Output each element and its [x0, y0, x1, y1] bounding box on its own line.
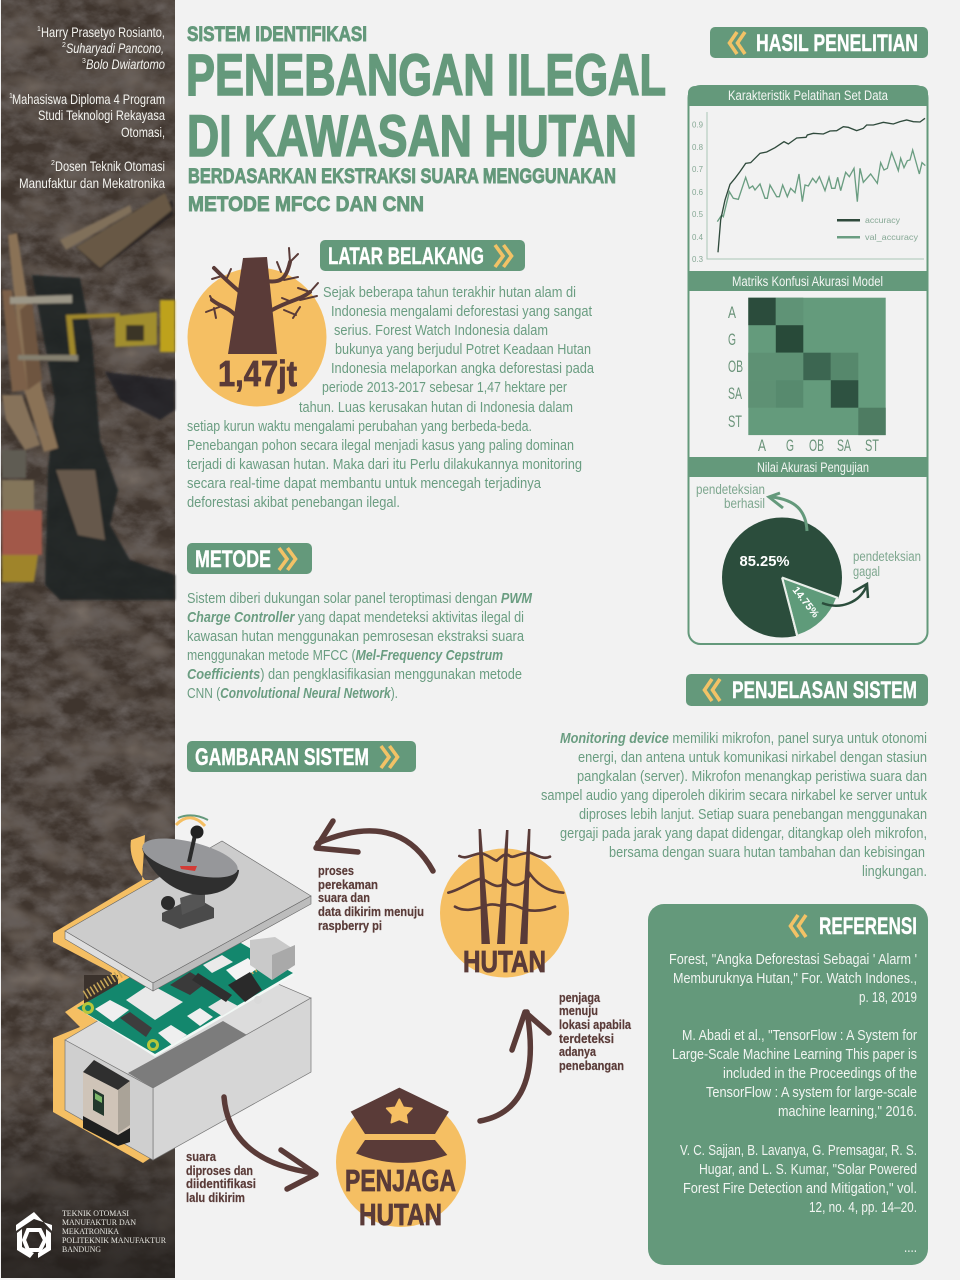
- text block: metode: Coefficients) dan pengklasifikasian menggunakan metode: [187, 666, 522, 683]
- text block: latar belakang: bukunya yang berjudul Potret Keadaan Hutan: [335, 341, 591, 358]
- line chart: accuracy and val_accuracy: val_accuracy: [865, 232, 919, 242]
- confusion matrix: [728, 298, 886, 455]
- reference list: machine learning," 2016.: [778, 1103, 917, 1120]
- chart header: matriks: Matriks Konfusi Akurasi Model: [732, 274, 883, 289]
- authors and affiliations: Suharyadi Pancono,: [66, 40, 164, 56]
- text block: latar belakang: deforestasi akibat penebangan ilegal.: [187, 494, 400, 511]
- reference list: ....: [904, 1239, 917, 1256]
- heading: penjelasan sistem: [686, 674, 928, 706]
- text block: latar belakang: periode 2013-2017 sebesar 1,47 hektare per: [322, 379, 567, 396]
- arrow: penjaga hutan to hutan: [480, 1012, 549, 1121]
- arrow: device to penjaga hutan: [224, 1097, 316, 1189]
- logo: politeknik manufaktur bandung: MEKATRONIKA: [62, 1227, 119, 1236]
- photo strip: logging site aerial: [1, 0, 175, 1278]
- reference list: Memburuknya Hutan," For. Watch Indones.,: [673, 970, 917, 987]
- authors and affiliations: 2: [62, 42, 66, 49]
- reference list: included in the Proceedings of the: [723, 1065, 917, 1082]
- line chart: accuracy and val_accuracy: accuracy: [865, 215, 901, 225]
- chart header: karakteristik: Karakteristik Pelatihan Set Data: [728, 88, 888, 103]
- heading: hasil penelitian: [710, 27, 928, 58]
- label: suara diproses: diidentifikasi: [186, 1176, 256, 1191]
- text block: latar belakang: setiap kurun waktu mengalami perubahan yang berbeda-beda.: [187, 418, 532, 435]
- icon: penjaga hutan: [336, 1088, 466, 1232]
- text block: metode: Charge Controller yang dapat mendeteksi aktivitas ilegal di: [187, 609, 524, 626]
- label: pendeteksian gagal: [822, 549, 921, 606]
- reference list: 12, no. 4, pp. 14–20.: [809, 1199, 917, 1216]
- illustration: monitoring device exploded view: [53, 815, 311, 1163]
- line chart: accuracy and val_accuracy: 0.8: [692, 142, 703, 152]
- authors and affiliations: Bolo Dwiartomo: [86, 56, 165, 72]
- logo: politeknik manufaktur bandung: MANUFAKTUR DAN: [62, 1218, 136, 1227]
- confusion matrix: OB: [728, 357, 743, 376]
- label: suara diproses: diproses dan: [186, 1163, 253, 1178]
- confusion matrix: ST: [728, 412, 742, 431]
- confusion matrix: G: [728, 330, 736, 349]
- chart header: nilai akurasi: Nilai Akurasi Pengujian: [757, 460, 869, 475]
- title: SISTEM IDENTIFIKASI: [187, 23, 367, 46]
- confusion matrix: OB: [809, 436, 824, 455]
- logo: politeknik manufaktur bandung: [16, 1209, 167, 1258]
- confusion matrix: A: [758, 436, 766, 455]
- text block: metode: kawasan hutan menggunakan pemrosesan ekstraksi suara: [187, 628, 525, 645]
- label: proses perekaman: perekaman: [318, 877, 378, 892]
- label: penjaga menuju lokasi: adanya: [559, 1044, 597, 1059]
- heading: referensi: REFERENSI: [819, 913, 917, 940]
- enclosure box: [65, 955, 311, 1160]
- label: penjaga menuju lokasi: penebangan: [559, 1058, 624, 1073]
- raspberry pi board: [77, 928, 295, 1057]
- reference list: [669, 951, 917, 1256]
- label: penjaga menuju lokasi: lokasi apabila: [559, 1017, 632, 1032]
- icon: tree stump with 1,47jt: [188, 248, 326, 406]
- label: pendeteksian berhasil: berhasil: [724, 496, 765, 511]
- authors and affiliations: Mahasiswa Diploma 4 Program: [12, 91, 165, 107]
- title: METODE MFCC DAN CNN: [188, 192, 424, 216]
- text block: latar belakang: [187, 284, 595, 511]
- authors and affiliations: Dosen Teknik Otomasi: [55, 158, 165, 174]
- text block: penjelasan sistem: [541, 730, 927, 880]
- confusion matrix: ST: [865, 436, 879, 455]
- authors and affiliations: 3: [82, 58, 86, 65]
- line chart: accuracy and val_accuracy: 0.5: [692, 209, 703, 219]
- label: penjaga menuju lokasi: penjaga: [559, 990, 601, 1005]
- authors and affiliations: 2: [51, 160, 55, 167]
- panel: referensi: [648, 904, 928, 1265]
- confusion matrix: G: [786, 436, 794, 455]
- reference list: TensorFlow : A system for large-scale: [706, 1084, 917, 1101]
- panel: hasil penelitian charts: [688, 86, 928, 644]
- solar charge controller: [83, 1060, 130, 1146]
- text block: latar belakang: Indonesia melaporkan angka deforestasi pada: [331, 360, 595, 377]
- chart header: nilai akurasi: [688, 457, 928, 477]
- heading: metode: METODE: [195, 546, 271, 573]
- authors and affiliations: 1: [37, 26, 41, 33]
- authors and affiliations: Otomasi,: [121, 124, 165, 140]
- label: proses perekaman: suara dan: [318, 890, 370, 905]
- authors and affiliations: Manufaktur dan Mekatronika: [19, 175, 165, 191]
- icon: tree stump with 1,47jt: 1,47jt: [218, 353, 297, 394]
- heading: latar belakang: LATAR BELAKANG: [328, 243, 484, 270]
- icon: penjaga hutan: PENJAGA: [345, 1163, 456, 1198]
- label: proses perekaman: proses: [318, 863, 354, 878]
- confusion matrix: A: [728, 303, 736, 322]
- label: pendeteksian gagal: pendeteksian: [853, 549, 921, 564]
- label: suara diproses: lalu dikirim: [186, 1190, 245, 1205]
- authors and affiliations: 1: [9, 93, 13, 100]
- text block: latar belakang: terjadi di kawasan hutan. Maka dari itu Perlu dilakukannya monitoring: [187, 456, 582, 473]
- title: DI KAWASAN HUTAN: [187, 104, 637, 169]
- reference list: M. Abadi et al., "TensorFlow : A System for: [682, 1027, 917, 1044]
- icon: penjaga hutan: HUTAN: [359, 1197, 442, 1232]
- label: penjaga menuju lokasi: terdeteksi: [559, 1031, 614, 1046]
- label: proses perekaman: raspberry pi: [318, 918, 382, 933]
- text block: metode: [187, 590, 532, 702]
- arrow: hutan to device: [316, 821, 433, 871]
- authors and affiliations: Studi Teknologi Rekayasa: [38, 107, 165, 123]
- text block: penjelasan sistem: lingkungan.: [862, 863, 927, 880]
- reference list: Forest Fire Detection and Mitigation," vol.: [683, 1180, 917, 1197]
- label: suara diproses: suara: [186, 1149, 217, 1164]
- line chart: accuracy and val_accuracy: [692, 112, 925, 264]
- chart header: matriks: [688, 271, 928, 291]
- heading: gambaran sistem: GAMBARAN SISTEM: [195, 744, 369, 771]
- title: BERDASARKAN EKSTRAKSI SUARA MENGGUNAKAN: [188, 164, 616, 188]
- label: pendeteksian berhasil: pendeteksian: [696, 482, 765, 497]
- text block: latar belakang: Penebangan pohon secara ilegal menjadi kasus yang paling dominan: [187, 437, 574, 454]
- text block: metode: Sistem diberi dukungan solar panel teroptimasi dengan PWM: [187, 590, 532, 607]
- reference list: Large-Scale Machine Learning This paper is: [672, 1046, 917, 1063]
- text block: latar belakang: secara real-time dapat membantu untuk mencegah terjadinya: [187, 475, 542, 492]
- pie chart: akurasi pengujian: 85.25%: [740, 553, 790, 570]
- label: suara diproses: [186, 1149, 256, 1205]
- device shadow outline: [53, 815, 208, 1163]
- top plate: [65, 841, 311, 991]
- label: proses perekaman: data dikirim menuju: [318, 904, 424, 919]
- text block: metode: CNN (Convolutional Neural Network).: [187, 685, 398, 702]
- reference list: p. 18, 2019: [859, 989, 917, 1006]
- pie chart: akurasi pengujian: [722, 518, 842, 640]
- label: penjaga menuju lokasi: menuju: [559, 1003, 598, 1018]
- line chart: accuracy and val_accuracy: 0.4: [692, 232, 703, 242]
- text block: latar belakang: serius. Forest Watch Indonesia dalam: [334, 322, 548, 339]
- icon: hutan: [440, 829, 569, 979]
- reference list: Hugar, and L. S. Kumar, "Solar Powered: [699, 1161, 917, 1178]
- reference list: Forest, "Angka Deforestasi Sebagai ' Alarm ': [669, 951, 917, 968]
- text block: metode: menggunakan metode MFCC (Mel-Frequency Cepstrum: [187, 647, 503, 664]
- line chart: accuracy and val_accuracy: 0.6: [692, 187, 703, 197]
- line chart: accuracy and val_accuracy: 0.9: [692, 120, 703, 130]
- logo: politeknik manufaktur bandung: BANDUNG: [62, 1245, 101, 1254]
- label: pendeteksian gagal: gagal: [853, 564, 880, 579]
- chart header: karakteristik: [688, 86, 928, 106]
- logo: politeknik manufaktur bandung: POLITEKNIK MANUFAKTUR: [62, 1236, 167, 1245]
- text block: latar belakang: tahun. Luas kerusakan hutan di Indonesia dalam: [299, 399, 573, 416]
- text block: latar belakang: Indonesia mengalami deforestasi yang sangat: [331, 303, 593, 320]
- logo: politeknik manufaktur bandung: TEKNIK OTOMASI: [62, 1209, 129, 1218]
- text block: latar belakang: Sejak beberapa tahun terakhir hutan alam di: [323, 284, 576, 301]
- heading: referensi: [790, 913, 917, 940]
- label: pendeteksian berhasil: [696, 482, 807, 531]
- line chart: accuracy and val_accuracy: 0.7: [692, 164, 703, 174]
- label: penjaga menuju lokasi: [559, 990, 632, 1073]
- title: PENEBANGAN ILEGAL: [186, 43, 666, 108]
- line chart: accuracy and val_accuracy: 0.3: [692, 254, 703, 264]
- title: [186, 23, 666, 216]
- confusion matrix: SA: [837, 436, 851, 455]
- confusion matrix: SA: [728, 384, 742, 403]
- pie chart: akurasi pengujian: 14.75%: [790, 584, 822, 621]
- authors and affiliations: Harry Prasetyo Rosianto,: [41, 24, 165, 40]
- authors and affiliations: [9, 24, 165, 191]
- icon: hutan: HUTAN: [463, 944, 546, 979]
- satellite dish antenna: [139, 826, 241, 929]
- label: proses perekaman: [318, 863, 424, 933]
